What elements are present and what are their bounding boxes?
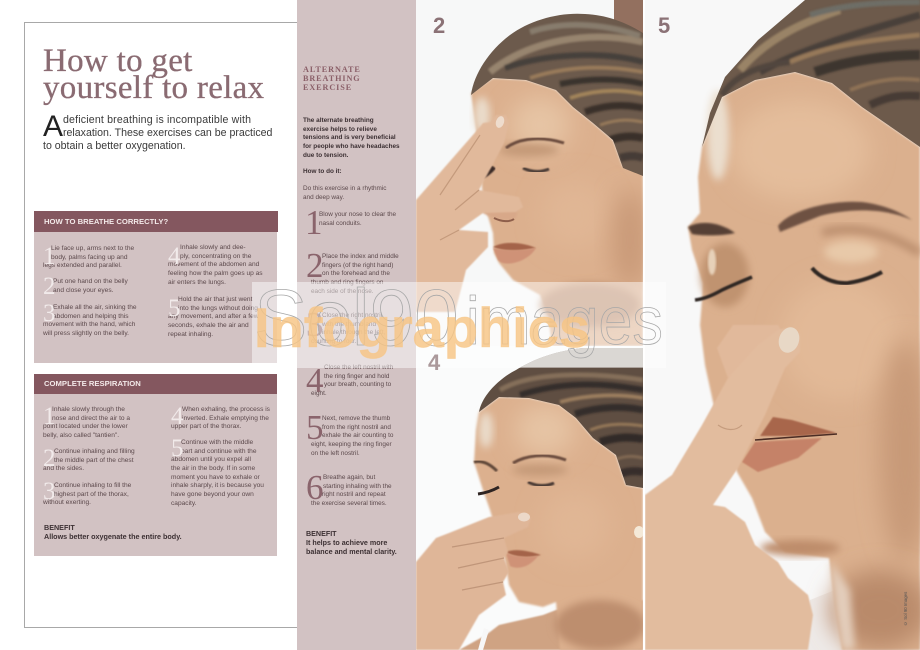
- panel: complete respiration: [34, 374, 277, 556]
- step 2: thumb and ring fingers on: [311, 279, 383, 286]
- step 5: 5: [171, 435, 184, 462]
- heading: [303, 65, 361, 92]
- step 2: each side of the nose.: [311, 288, 374, 295]
- step 3: without exerting.: [43, 499, 91, 506]
- how to do it: How to do it:: [303, 168, 342, 175]
- step 4: eight.: [311, 390, 327, 397]
- number 4: 4: [428, 350, 440, 375]
- step 2: and the sides.: [43, 465, 84, 472]
- intro text: A: [43, 110, 63, 143]
- step 4: air enters the lungs.: [168, 279, 226, 286]
- benefit: Allows better oxygenate the entire body.: [44, 532, 182, 541]
- heading: BREATHING: [303, 74, 361, 83]
- title: How to get: [43, 43, 193, 79]
- step 3: 3: [43, 300, 56, 327]
- step 2: [43, 445, 135, 472]
- step 4: feeling how the palm goes up as: [168, 270, 263, 277]
- step 3: Continue inhaling to fill the: [54, 482, 131, 489]
- step 2: the middle part of the chest: [54, 457, 134, 464]
- intro: for people who have headaches: [303, 143, 400, 150]
- step 4: ply, concentrating on the: [180, 253, 251, 260]
- step 1: nose and direct the air to a: [52, 415, 130, 422]
- step 5: the air in the body. If in some: [171, 465, 255, 472]
- step 5: abdomen until you expel all: [171, 456, 251, 463]
- heading: ALTERNATE: [303, 65, 361, 74]
- step 5: repeat inhaling.: [168, 331, 213, 338]
- step 6: Breathe again, but: [323, 474, 375, 481]
- step 5: inhale sharply, it is because you: [171, 482, 264, 489]
- intro text: deficient breathing is incompatible with: [63, 114, 251, 126]
- step 4: 4: [168, 243, 180, 270]
- step 4: movement of the abdomen and: [168, 261, 259, 268]
- step 2: [306, 246, 399, 295]
- step 6: right nostril and repeat: [322, 491, 386, 498]
- step 1: [305, 203, 396, 242]
- step 2: Place the index and middle: [322, 253, 399, 260]
- title: [43, 43, 264, 106]
- step 3: abdomen and helping this: [53, 313, 129, 320]
- step 1: Blow your nose to clear the: [319, 211, 396, 218]
- step 6: the exercise several times.: [311, 500, 387, 507]
- step 4: 4: [306, 361, 324, 400]
- heading: [34, 374, 277, 394]
- heading: EXERCISE: [303, 83, 352, 92]
- step 3: with the thumb and: [322, 321, 376, 328]
- step 5: seconds, exhale the air and: [168, 322, 249, 329]
- step 4: upper part of the thorax.: [171, 423, 241, 430]
- number 5: 5: [658, 13, 670, 38]
- step 6: 6: [306, 468, 324, 507]
- step 1: [43, 403, 130, 439]
- step 4: your breath, counting to: [324, 381, 391, 388]
- step 5: 5: [168, 295, 180, 322]
- step 6: starting inhaling with the: [323, 483, 392, 490]
- benefit: BENEFIT: [44, 523, 75, 532]
- step 1: 1: [43, 243, 56, 270]
- step 4: [171, 403, 270, 430]
- step 1: belly, also called "tantien".: [43, 432, 119, 439]
- rhythm note: Do this exercise in a rhythmic: [303, 185, 386, 192]
- step 3: Exhale all the air, sinking the: [53, 304, 137, 311]
- intro: exercise helps to relieve: [303, 126, 377, 133]
- step 3: counting to four.: [311, 338, 356, 345]
- step 5: Hold the air that just went: [178, 296, 252, 303]
- step 1: nasal conduits.: [319, 220, 362, 227]
- watermark: [252, 282, 663, 368]
- step 2: on the forehead and the: [322, 270, 390, 277]
- step 5: 5: [306, 408, 324, 447]
- step 4: [306, 361, 393, 400]
- step 1: 1: [305, 203, 322, 242]
- step 5: part and continue with the: [181, 448, 257, 455]
- photo 2: fingers on forehead: [416, 0, 648, 346]
- step 5: any movement, and after a few: [168, 313, 259, 320]
- step 1: [43, 243, 134, 270]
- step 1: 1: [43, 403, 56, 430]
- step 5: eight, keeping the ring finger: [311, 441, 392, 448]
- step 4: Inhale slowly and dee-: [180, 244, 246, 251]
- title: yourself to relax: [43, 70, 264, 106]
- step 3: will press slightly on the belly.: [43, 330, 129, 337]
- step 5: [168, 295, 259, 338]
- photo 5: finger pressing nostril: [645, 0, 920, 650]
- intro text: [43, 110, 272, 152]
- benefit: balance and mental clarity.: [306, 548, 397, 556]
- watermark: Infographics: [254, 296, 590, 359]
- step 3: [43, 478, 131, 506]
- step 5: have gone beyond your own: [171, 491, 254, 498]
- step 4: When exhaling, the process is: [182, 406, 270, 413]
- step 5: into the lungs without doing: [178, 305, 258, 312]
- step 6: [306, 468, 392, 507]
- benefit: It helps to achieve more: [306, 539, 387, 547]
- step 4: [168, 243, 263, 286]
- step 5: moment you have to exhale or: [171, 474, 260, 481]
- heading: COMPLETE RESPIRATION: [44, 379, 141, 388]
- step 3: highest part of the thorax,: [54, 491, 129, 498]
- panel: alternate breathing exercise: [297, 0, 416, 650]
- step 1: legs extended and parallel.: [43, 262, 122, 269]
- benefit: BENEFIT: [306, 530, 337, 538]
- benefit: [44, 523, 182, 541]
- heading: [34, 211, 278, 232]
- step 4: Close the left nostril with: [324, 364, 393, 371]
- step 5: on the left nostril.: [311, 450, 360, 457]
- photo 4: fingers on nose: [416, 345, 645, 650]
- step 3: [306, 305, 385, 345]
- step 2: Put one hand on the belly: [53, 278, 128, 285]
- panel: how to breathe correctly: [34, 211, 278, 363]
- step 3: 3: [306, 305, 324, 344]
- step 1: point located under the lower: [43, 423, 128, 430]
- step 2: Continue inhaling and filling: [54, 448, 135, 455]
- rhythm note: and deep way.: [303, 194, 344, 201]
- step 2: and close your eyes.: [53, 287, 113, 294]
- step 4: the ring finger and hold: [324, 373, 389, 380]
- step 2: fingers (of the right hand): [322, 262, 393, 269]
- step 4: 4: [171, 403, 184, 430]
- step 5: capacity.: [171, 500, 197, 507]
- step 3: inhale through the left,: [322, 329, 385, 336]
- step 2: [43, 273, 128, 300]
- rhythm note: [303, 185, 386, 201]
- step 1: body, palms facing up and: [51, 254, 128, 261]
- step 2: 2: [43, 445, 56, 472]
- step 3: 3: [43, 478, 56, 505]
- intro: due to tension.: [303, 152, 348, 159]
- step 2: 2: [306, 246, 324, 285]
- step 5: [171, 435, 264, 507]
- step 1: Inhale slowly through the: [52, 406, 125, 413]
- left page frame: [24, 22, 298, 628]
- step 4: inverted. Exhale emptying the: [182, 415, 269, 422]
- intro text: to obtain a better oxygenation.: [43, 140, 186, 152]
- step 5: [306, 408, 394, 457]
- step 5: Continue with the middle: [181, 439, 253, 446]
- heading: HOW TO BREATHE CORRECTLY?: [44, 217, 168, 226]
- intro: [303, 117, 400, 159]
- step 1: Lie face up, arms next to the: [51, 245, 134, 252]
- benefit: [306, 530, 397, 556]
- number 2: 2: [433, 13, 445, 38]
- step 5: from the right nostril and: [322, 424, 391, 431]
- intro text: relaxation. These exercises can be practiced: [63, 127, 272, 139]
- step 3: Close the right nostril: [322, 312, 382, 319]
- step 3: movement with the hand, which: [43, 321, 135, 328]
- step 3: [43, 300, 137, 337]
- step 5: Next, remove the thumb: [322, 415, 390, 422]
- copyright: © Sol 90 Images: [903, 592, 908, 626]
- intro: tensions and is very beneficial: [303, 134, 396, 141]
- intro: The alternate breathing: [303, 117, 374, 124]
- step 2: 2: [43, 273, 56, 300]
- step 5: exhale the air counting to: [322, 432, 393, 439]
- photographs: [416, 0, 920, 650]
